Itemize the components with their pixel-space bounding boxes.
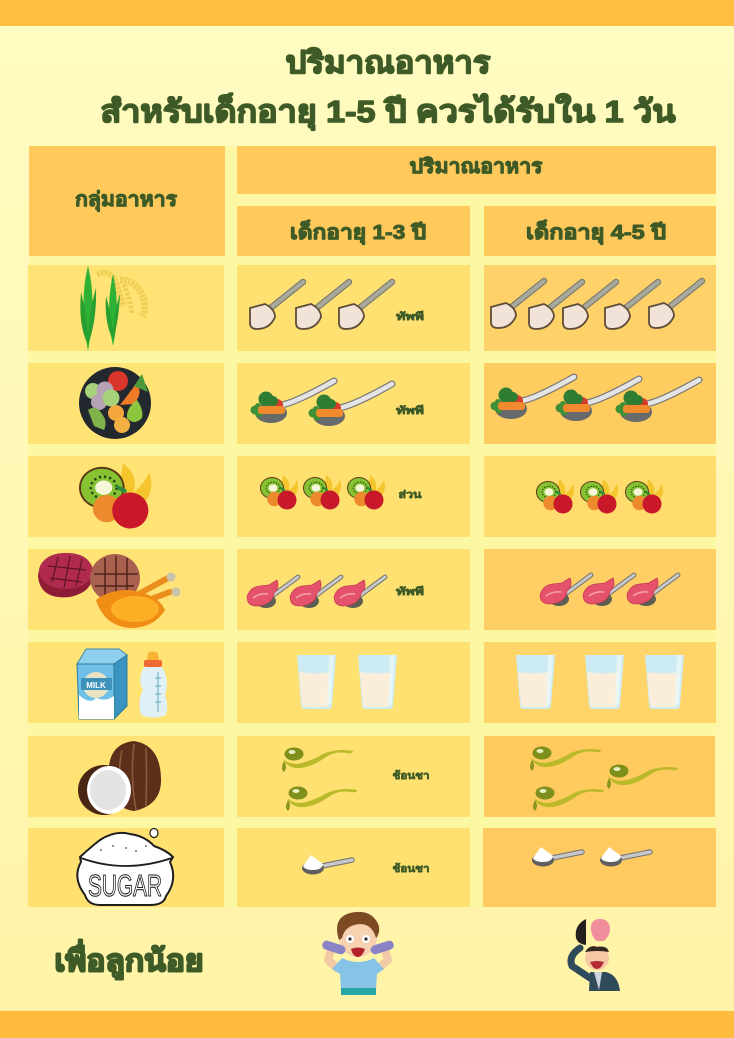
meat spoons, age 4-5 [540,575,678,606]
icon: boy lifting dumbbells [321,912,395,995]
icon: coconut [78,741,161,815]
title: ปริมาณอาหาร [286,45,491,80]
sugar spoons, age 4-5 [532,847,650,866]
icon: sugar bowl [77,828,173,905]
unit label: ทัพพี [396,310,424,323]
rice spoons, age 4-5 [491,281,702,329]
header: age 4-5 [484,206,716,256]
header: food amount: ปริมาณอาหาร [410,156,543,178]
sugar spoon, age 1-3 [302,855,352,874]
header: age 1-3: เด็กอายุ 1-3 ปี [290,219,426,245]
icon: vegetable plate [79,367,151,439]
vegetable spoons, age 1-3 [250,381,392,426]
milk glasses, age 1-3 [297,655,397,709]
fruit, age 4-5 [536,479,663,514]
unit label: ช้อนชา [392,769,430,782]
title [100,45,676,131]
unit label: ส่วน [398,489,422,501]
icon: sugar bowl: SUGAR [88,868,162,903]
oil spoons, age 1-3 [282,748,357,811]
vegetable spoons, age 4-5 [490,377,699,422]
milk glasses, age 4-5 [516,655,684,709]
icon: milk carton and baby bottle: MILK [86,681,106,690]
icon: rice plants [80,266,145,351]
row: fats [28,736,715,817]
header: food amount [237,146,716,194]
fruit, age 1-3 [260,475,385,510]
icon: steaks and roast chicken [38,553,180,628]
unit label: ช้อนชา [392,862,430,875]
row: sugar [28,828,716,907]
unit label: ทัพพี [396,404,424,417]
icon: milk carton and baby bottle [77,649,167,719]
top banner bar [0,0,734,26]
row: rice and starches [28,265,716,351]
row: meat [28,549,716,630]
row: fruit [28,456,716,537]
icon: man with brain lightbulb [571,919,620,991]
icon: fruit group [79,463,151,529]
meat spoons, age 1-3 [247,577,385,608]
row: milk [28,642,716,723]
header: age 4-5: เด็กอายุ 4-5 ปี [526,219,666,245]
title: สำหรับเด็กอายุ 1-5 ปี ควรได้รับใน 1 วัน [100,92,676,131]
header: age 1-3 [237,206,470,256]
food table [28,146,716,907]
unit label: ทัพพี [396,585,424,598]
bottom banner bar [0,1011,734,1038]
footer slogan: เพื่อลูกน้อย [54,939,204,980]
row: vegetables [28,363,716,444]
rice spoons, age 1-3 [250,282,392,329]
header: food group: กลุ่มอาหาร [75,189,177,212]
header: food group [29,146,225,256]
oil spoons, age 4-5 [530,746,678,811]
